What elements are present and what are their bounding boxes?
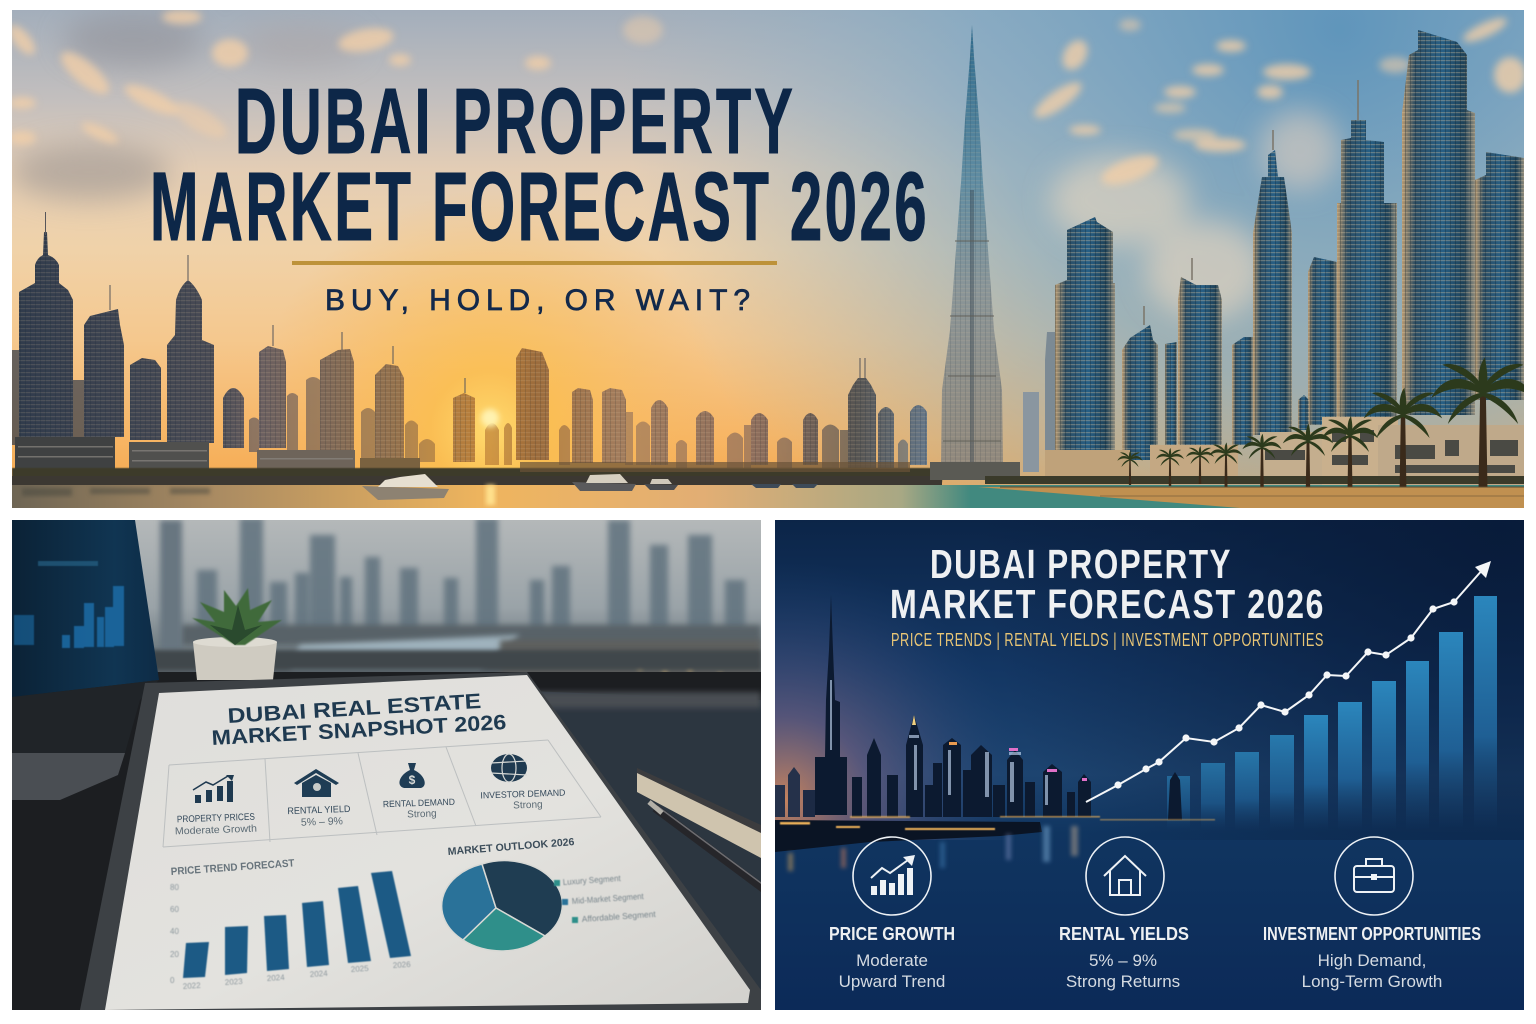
- main title: MARKET FORECAST 2026: [150, 152, 929, 261]
- metric: rental yield: [288, 806, 350, 826]
- price trend heading: PRICE TREND FORECAST: [170, 857, 295, 878]
- price trend bar chart: 2022: [183, 981, 201, 991]
- price trend bar chart: 2025: [351, 964, 369, 974]
- document title: MARKET SNAPSHOT 2026: [211, 711, 507, 750]
- waterfront low-rise and tree band: [12, 437, 942, 485]
- price trend bar chart: 2024: [310, 969, 328, 979]
- column: rental yields: RENTAL YIELDS: [1059, 924, 1189, 944]
- notebook: [637, 768, 761, 858]
- city lights: [830, 680, 1087, 805]
- price trend bar chart: 2026: [393, 960, 411, 970]
- clouds: [4, 10, 1526, 320]
- laptop: [12, 520, 159, 800]
- column: investment opportunities: Long-Term Growth: [1302, 972, 1442, 991]
- metric: rental yield: 5% – 9%: [301, 815, 343, 829]
- icon: rising bar chart: [193, 775, 234, 803]
- panel title: [890, 541, 1325, 627]
- main title: DUBAI PROPERTY: [235, 69, 796, 173]
- water: [12, 485, 1524, 508]
- panel: market snapshot document on desk: [12, 518, 765, 1010]
- column: price growth: [829, 924, 955, 991]
- panel title: MARKET FORECAST 2026: [890, 581, 1325, 627]
- price trend bar chart: 20: [170, 950, 179, 959]
- column: rental yields: [1059, 924, 1189, 991]
- icon: money bag: [399, 763, 425, 788]
- metric: investor demand: Strong: [513, 799, 543, 812]
- pie legend: Luxury Segment: [562, 873, 622, 887]
- navy background: [775, 520, 1524, 1010]
- price trend bar chart: 2024: [267, 973, 285, 983]
- palm trees: [985, 358, 1524, 486]
- column: price growth: PRICE GROWTH: [829, 924, 955, 944]
- pie chart: [442, 861, 562, 951]
- price trend bar chart: 60: [170, 905, 179, 914]
- metric: rental demand: RENTAL DEMAND: [383, 797, 456, 809]
- price trend bar chart: 2023: [225, 977, 243, 987]
- icon: house: [1086, 837, 1164, 915]
- icon: price growth: [853, 837, 931, 915]
- market outlook heading: MARKET OUTLOOK 2026: [447, 836, 575, 858]
- left distant skyline: [12, 212, 927, 468]
- boats: [362, 474, 818, 500]
- metric: rental yield: RENTAL YIELD: [287, 804, 351, 817]
- panel: navy forecast chart: [775, 520, 1524, 1010]
- column: price growth: Upward Trend: [839, 972, 945, 991]
- subtitle: BUY, HOLD, OR WAIT?: [325, 284, 750, 317]
- column: investment opportunities: INVESTMENT OPPORTUNITIES: [1263, 924, 1481, 944]
- panel: hero skyline at sunset: [4, 10, 1535, 508]
- desk surface: [12, 672, 761, 1010]
- document sheet: [105, 675, 750, 1010]
- column: investment opportunities: High Demand,: [1318, 951, 1426, 970]
- night city skyline: [775, 595, 1182, 820]
- sky background: [12, 10, 1524, 508]
- shoreline: [775, 816, 1215, 852]
- blue forecast bars: [1167, 596, 1497, 830]
- price trend bar chart: 0: [170, 976, 175, 985]
- right towers: [1023, 30, 1524, 472]
- setting sun: [481, 409, 499, 427]
- plant in white pot: [192, 588, 282, 680]
- metric: property prices: Moderate Growth: [175, 824, 257, 837]
- column: investment opportunities: [1263, 924, 1481, 991]
- metric: investor demand: [481, 790, 565, 810]
- waterfront podium buildings: [1045, 417, 1524, 485]
- rising trend line with arrow: [1086, 561, 1491, 802]
- metric: property prices: [176, 813, 256, 834]
- pie legend: [554, 873, 657, 924]
- price trend bar chart: [170, 871, 411, 991]
- pie legend: Mid-Market Segment: [571, 891, 645, 906]
- column: rental yields: Strong Returns: [1066, 972, 1180, 991]
- icon: briefcase: [1335, 837, 1413, 915]
- main title: [150, 69, 929, 261]
- column: rental yields: 5% – 9%: [1089, 951, 1157, 970]
- metric: property prices: PROPERTY PRICES: [177, 812, 255, 825]
- column: price growth: Moderate: [856, 951, 928, 970]
- pie legend: Affordable Segment: [581, 909, 657, 924]
- water reflection: [788, 826, 1078, 871]
- icon: globe: [491, 754, 527, 782]
- pen: [649, 802, 765, 890]
- document title: [212, 694, 506, 745]
- metric grid lines: [163, 740, 601, 847]
- blurred window view: [135, 520, 761, 672]
- panel subtitle: PRICE TRENDS | RENTAL YIELDS | INVESTMENT OPPORTUNITIES: [891, 630, 1324, 650]
- metric: investor demand: INVESTOR DEMAND: [480, 788, 566, 800]
- icon: money bag: $: [409, 773, 416, 787]
- panel title: DUBAI PROPERTY: [930, 541, 1232, 587]
- clipboard behind document: [80, 672, 761, 1010]
- metric: rental demand: [384, 798, 454, 819]
- price trend bar chart: 80: [170, 883, 179, 892]
- icon: Burj Khalifa tower: [930, 25, 1020, 480]
- icon: house: [294, 769, 339, 797]
- metric: rental demand: Strong: [407, 808, 437, 821]
- price trend bar chart: 40: [170, 927, 179, 936]
- gold divider: [292, 261, 777, 265]
- promenade: [978, 487, 1524, 508]
- document title: DUBAI REAL ESTATE: [227, 690, 482, 728]
